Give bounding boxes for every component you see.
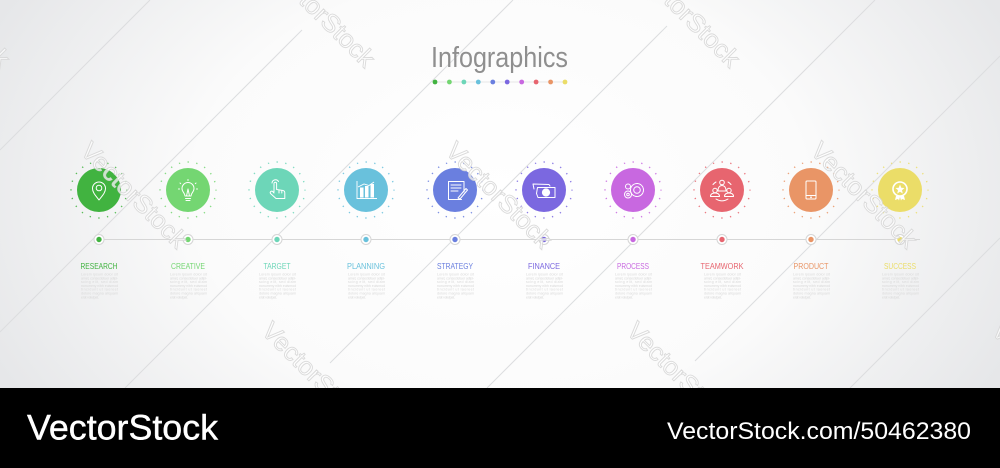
step: target: scing elit, sed diam — [259, 280, 296, 284]
watermarks: VectorStock — [621, 317, 739, 434]
step: success: nonummy nibh euismod — [882, 284, 919, 288]
step: success: dolore magna aliquam — [882, 292, 919, 296]
watermarks: VectorStock — [805, 137, 923, 254]
step: strategy: STRATEGY — [437, 261, 473, 271]
step: planning: tincidunt ut laoreet — [348, 288, 385, 292]
step: creative: CREATIVE — [171, 261, 205, 271]
step: teamwork: dolore magna aliquam — [704, 292, 741, 296]
step: product: erat volutpat. — [793, 295, 811, 299]
watermarks: VectorStock — [440, 137, 558, 254]
title: Infographics — [431, 42, 568, 74]
step: research: tincidunt ut laoreet — [81, 288, 118, 292]
icon: team of people — [710, 180, 734, 201]
step: research: RESEARCH — [80, 261, 118, 271]
step: process: PROCESS — [617, 261, 649, 271]
step: teamwork: TEAMWORK — [700, 261, 744, 271]
step: finance: Lorem ipsum dolor sit — [526, 272, 563, 276]
step: teamwork: erat volutpat. — [704, 295, 722, 299]
step: finance: erat volutpat. — [526, 295, 544, 299]
step: process: nonummy nibh euismod — [615, 284, 652, 288]
step: strategy: nonummy nibh euismod — [437, 284, 474, 288]
step: creative: scing elit, sed diam — [170, 280, 207, 284]
step: creative: erat volutpat. — [170, 295, 188, 299]
step: finance: tincidunt ut laoreet — [526, 288, 563, 292]
timeline axis — [99, 238, 920, 240]
step: target: TARGET — [264, 261, 290, 271]
icon: gears — [624, 184, 644, 198]
step: target: erat volutpat. — [259, 295, 277, 299]
title dot row — [433, 80, 567, 84]
step: process: tincidunt ut laoreet — [615, 288, 652, 292]
step: success: tincidunt ut laoreet — [882, 288, 919, 292]
icon: bar chart — [357, 181, 377, 198]
step: process: Lorem ipsum dolor sit — [615, 272, 652, 276]
step: product: PRODUCT — [794, 261, 828, 271]
step: research: nonummy nibh euismod — [81, 284, 118, 288]
step: strategy: amet, consectetuer adipi- — [437, 276, 475, 280]
step: process — [605, 162, 661, 299]
step: product: Lorem ipsum dolor sit — [793, 272, 830, 276]
step: finance: nonummy nibh euismod — [526, 284, 563, 288]
step: planning: scing elit, sed diam — [348, 280, 385, 284]
step: finance: FINANCE — [528, 261, 560, 271]
icon: banknotes — [533, 184, 555, 198]
icon: smartphone — [806, 181, 816, 199]
step: teamwork — [694, 162, 750, 299]
step: strategy: tincidunt ut laoreet — [437, 288, 474, 292]
step: product: dolore magna aliquam — [793, 292, 830, 296]
watermarks: VectorStock — [75, 137, 193, 254]
step: creative: nonummy nibh euismod — [170, 284, 207, 288]
footer image id: VectorStock.com/50462380 — [667, 418, 971, 445]
step: planning: Lorem ipsum dolor sit — [348, 272, 385, 276]
step: product — [783, 162, 839, 299]
footer bar — [0, 388, 1000, 468]
step: process: scing elit, sed diam — [615, 280, 652, 284]
step: strategy — [427, 162, 483, 299]
step: planning — [338, 162, 394, 299]
step: planning: nonummy nibh euismod — [348, 284, 385, 288]
step: product: nonummy nibh euismod — [793, 284, 830, 288]
icon: map pin — [92, 182, 106, 200]
footer brand: VectorStock — [27, 408, 218, 448]
step: strategy: scing elit, sed diam — [437, 280, 474, 284]
step: target: dolore magna aliquam — [259, 292, 296, 296]
icon: document and pen — [448, 182, 468, 200]
step: creative: dolore magna aliquam — [170, 292, 207, 296]
step: strategy: dolore magna aliquam — [437, 292, 474, 296]
step: planning: erat volutpat. — [348, 295, 366, 299]
step: creative — [160, 162, 216, 299]
step: finance — [516, 162, 572, 299]
step: creative: tincidunt ut laoreet — [170, 288, 207, 292]
step: success: scing elit, sed diam — [882, 280, 919, 284]
step: target: Lorem ipsum dolor sit — [259, 272, 296, 276]
step: teamwork: nonummy nibh euismod — [704, 284, 741, 288]
icon: pointing hand — [270, 180, 285, 198]
step: research — [71, 162, 127, 299]
step: strategy: Lorem ipsum dolor sit — [437, 272, 474, 276]
step: process: erat volutpat. — [615, 295, 633, 299]
step: finance: scing elit, sed diam — [526, 280, 563, 284]
step: planning: PLANNING — [347, 261, 385, 271]
step: product: amet, consectetuer adipi- — [793, 276, 831, 280]
step: finance: amet, consectetuer adipi- — [526, 276, 564, 280]
step: research: erat volutpat. — [81, 295, 99, 299]
step: process: dolore magna aliquam — [615, 292, 652, 296]
icon: light bulb — [178, 180, 198, 200]
step: creative: Lorem ipsum dolor sit — [170, 272, 207, 276]
step: strategy: erat volutpat. — [437, 295, 455, 299]
step: research: dolore magna aliquam — [81, 292, 118, 296]
step: creative: amet, consectetuer adipi- — [170, 276, 208, 280]
icon: award rosette — [893, 182, 907, 200]
step: teamwork: tincidunt ut laoreet — [704, 288, 741, 292]
step: finance: dolore magna aliquam — [526, 292, 563, 296]
step: target — [249, 162, 305, 299]
step: success: SUCCESS — [884, 261, 916, 271]
step: success: erat volutpat. — [882, 295, 900, 299]
step: research: scing elit, sed diam — [81, 280, 118, 284]
step: research: Lorem ipsum dolor sit — [81, 272, 118, 276]
step: process: amet, consectetuer adipi- — [615, 276, 653, 280]
step: planning: amet, consectetuer adipi- — [348, 276, 386, 280]
step: success: amet, consectetuer adipi- — [882, 276, 920, 280]
step: target: nonummy nibh euismod — [259, 284, 296, 288]
step: product: scing elit, sed diam — [793, 280, 830, 284]
step: planning: dolore magna aliquam — [348, 292, 385, 296]
step: teamwork: amet, consectetuer adipi- — [704, 276, 742, 280]
step: target: amet, consectetuer adipi- — [259, 276, 297, 280]
step: teamwork: Lorem ipsum dolor sit — [704, 272, 741, 276]
step: teamwork: scing elit, sed diam — [704, 280, 741, 284]
step: product: tincidunt ut laoreet — [793, 288, 830, 292]
step: success: Lorem ipsum dolor sit — [882, 272, 919, 276]
watermarks: VectorStock — [256, 317, 374, 434]
step: success — [872, 162, 928, 299]
step: research: amet, consectetuer adipi- — [81, 276, 119, 280]
step: target: tincidunt ut laoreet — [259, 288, 296, 292]
